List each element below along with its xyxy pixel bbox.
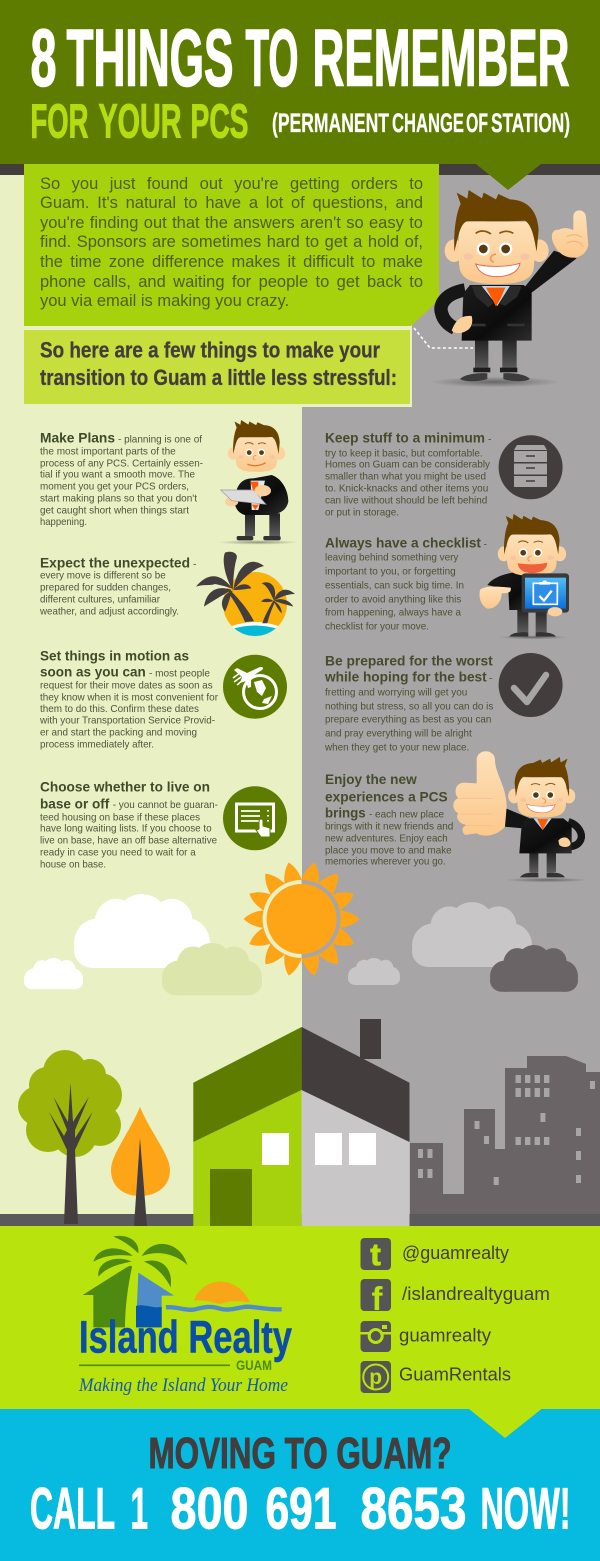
item: always have a checklist: checklist for your move. [325, 622, 429, 633]
icon: palm trees and sunset [196, 552, 295, 640]
dark strip below header [0, 164, 600, 175]
item: enjoy the new experiences: experiences a PCS [325, 788, 448, 804]
item: enjoy the new experiences: brings with it new friends and [325, 821, 454, 832]
item: always have a checklist: essentials, can suck big time. In [325, 581, 464, 592]
social: facebook: f [372, 1280, 384, 1317]
item: make plans: Make Plans [40, 430, 115, 446]
item: choose whether to live on base: live on base, have an off base alternative [40, 835, 217, 846]
icon: check mark [499, 653, 563, 717]
logo: Island Realty Guam [78, 1236, 292, 1396]
item: enjoy the new experiences: - each new place [369, 809, 444, 820]
item: keep stuff to a minimum: smaller than what you might be used [325, 471, 486, 482]
item: always have a checklist: order to avoid anything like this [325, 595, 461, 606]
icon: touch screen [223, 786, 287, 850]
illustration: orange tree [111, 1107, 170, 1226]
social: pinterest: p [369, 1366, 382, 1389]
panel: call to action [0, 1409, 600, 1561]
item: set things in motion: request for their move dates as soon as [40, 680, 213, 691]
item: keep stuff to a minimum [325, 430, 491, 518]
social: twitter: t [370, 1237, 381, 1272]
subtitle note: (PERMANENT [272, 108, 389, 138]
item: choose whether to live on base: house on base. [40, 859, 106, 870]
item: set things in motion: with your Transportation Service Provid- [39, 715, 215, 726]
header banner [0, 0, 600, 190]
ground strip [0, 1214, 600, 1226]
item: always have a checklist: Always have a checklist [325, 535, 481, 551]
call to action phone number: 8653 [360, 1477, 466, 1542]
intro paragraph: you're finding out that the answers aren't so easy to [40, 214, 423, 232]
item: be prepared for the worst: nothing but stress, so all you can do is [325, 702, 493, 713]
item: keep stuff to a minimum: or put in storage. [325, 507, 399, 518]
item: set things in motion: soon as you can [40, 664, 146, 680]
item: make plans: process of any PCS. Certainly essen- [40, 459, 203, 470]
icon: filing cabinet [499, 435, 563, 499]
item: be prepared for the worst: Be prepared for the worst [325, 653, 493, 669]
intro paragraph: Guam. It's natural to have a lot of questions, and [40, 194, 423, 212]
item: always have a checklist: leaving behind something very [325, 553, 459, 564]
intro paragraph: So you just found out you're getting orders to [40, 175, 423, 193]
subtitle: FOR [30, 96, 88, 148]
logo: Island Realty Guam: Making the Island Your Home [78, 1375, 288, 1396]
item: expect the unexpected: Expect the unexpected [40, 555, 190, 571]
item: be prepared for the worst: fretting and worrying will get you [325, 688, 468, 699]
item: enjoy the new experiences [325, 771, 454, 868]
social: pinterest: GuamRentals [399, 1364, 511, 1385]
item: always have a checklist: from happening, always have a [325, 608, 461, 619]
item: set things in motion: er and start the packing and moving [40, 727, 197, 738]
social: twitter [360, 1237, 510, 1272]
item: set things in motion [39, 648, 219, 750]
heading: moving to Guam: MOVING TO GUAM? [148, 1430, 452, 1478]
item: be prepared for the worst: prepare everything as best as you can [325, 715, 492, 726]
item: be prepared for the worst: when they get to your new place. [324, 743, 469, 754]
panel: intro box [24, 164, 439, 326]
panel: lead-in box: transition to Guam a little less stressful: [40, 365, 397, 390]
title: 8 [30, 14, 56, 104]
social: twitter: @guamrealty [402, 1242, 510, 1263]
subtitle note: OF [466, 108, 488, 138]
item: choose whether to live on base: Choose whether to live on [40, 779, 210, 795]
item: be prepared for the worst [324, 653, 493, 754]
item: expect the unexpected: different cultures, unfamiliar [40, 594, 160, 605]
subtitle note: CHANGE [392, 108, 464, 138]
item: expect the unexpected: weather, and adjust accordingly. [39, 606, 179, 617]
social: facebook [360, 1279, 550, 1317]
panel: footer contact band [0, 1226, 600, 1410]
item: make plans: tial if you want a smooth move. The [40, 470, 195, 481]
item: choose whether to live on base [40, 779, 218, 870]
background: grey half [302, 170, 600, 1226]
social: pinterest [360, 1361, 511, 1393]
item: be prepared for the worst: and pray everything will be alright [325, 729, 472, 740]
intro paragraph: the time zone difference makes it difficult to make [40, 253, 423, 271]
item: always have a checklist [325, 535, 487, 633]
item: enjoy the new experiences: Enjoy the new [325, 771, 417, 787]
logo: Island Realty Guam: Island Realty [79, 1312, 292, 1363]
item: enjoy the new experiences: memories wherever you go. [325, 857, 446, 868]
item: be prepared for the worst: while hoping for the best [324, 669, 487, 685]
call to action phone number: 1 [130, 1477, 148, 1542]
item: choose whether to live on base: ready in case you need to wait for a [40, 847, 196, 858]
social: instagram: guamrealty [399, 1325, 492, 1346]
illustration: businessman with tablet [218, 420, 298, 545]
item: make plans [40, 430, 203, 528]
item: enjoy the new experiences: place you move to and make [325, 845, 452, 856]
item: always have a checklist: important to you, or forgetting [325, 567, 456, 578]
panel: lead-in box: So here are a few things to make your [40, 337, 380, 362]
item: make plans: get caught short when things start [40, 506, 189, 517]
logo: Island Realty Guam: GUAM [236, 1358, 272, 1373]
item: keep stuff to a minimum: Keep stuff to a minimum [325, 430, 485, 446]
item: keep stuff to a minimum: to. Knick-knacks and other items you [325, 483, 489, 494]
item: expect the unexpected: prepared for sudden changes, [40, 582, 171, 593]
item: make plans: happening. [40, 517, 87, 528]
call to action phone number: 800 [170, 1477, 248, 1542]
item: choose whether to live on base: teed housing on base if these places [40, 812, 200, 823]
item: make plans: moment you get your PCS orders, [40, 482, 189, 493]
title: THINGS [66, 14, 234, 104]
item: make plans: the most important parts of the [40, 447, 176, 458]
dashed connector [414, 328, 473, 348]
icon: plane and globe [223, 655, 287, 719]
item: keep stuff to a minimum: can live without should be left behind [325, 495, 488, 506]
subtitle: PCS [190, 96, 248, 148]
social: instagram [360, 1321, 492, 1352]
illustration: clouds, sunny side [24, 894, 262, 995]
item: be prepared for the worst: - [489, 674, 492, 685]
background: light area behind intro boxes [0, 170, 412, 407]
illustration: city skyline [410, 1056, 600, 1214]
subtitle: YOUR [98, 96, 182, 148]
illustration: pointing businessman [430, 190, 588, 387]
item: expect the unexpected [39, 555, 196, 617]
item: set things in motion: Set things in motion as [40, 648, 189, 664]
title: TO [246, 14, 298, 104]
intro paragraph [40, 175, 423, 310]
illustration: businessman with checklist tablet [479, 514, 569, 639]
call to action phone number: CALL [30, 1477, 114, 1542]
illustration: sun [244, 860, 360, 978]
intro paragraph: you via email is making you crazy. [40, 292, 289, 310]
item: keep stuff to a minimum: Homes on Guam can be considerably [325, 459, 491, 470]
item: choose whether to live on base: have long waiting lists. If you choose to [40, 823, 212, 834]
illustration: businessman thumbs up [453, 751, 588, 882]
item: always have a checklist: - [484, 540, 487, 551]
item: enjoy the new experiences: new adventures. Enjoy each [325, 833, 448, 844]
item: set things in motion: them to do this. Confirm these dates [40, 704, 199, 715]
panel: lead-in box [23, 329, 411, 405]
background: light half [0, 0, 302, 1226]
item: set things in motion: they know when it is most convenient for [40, 692, 219, 703]
item: keep stuff to a minimum: - [488, 435, 491, 446]
illustration: clouds, grey side [348, 902, 578, 992]
item: make plans: start making plans so that you don't [40, 494, 197, 505]
call to action phone number: 691 [266, 1477, 336, 1542]
item: set things in motion: - most people [149, 669, 210, 680]
item: keep stuff to a minimum: try to keep it basic, but comfortable. [325, 449, 483, 460]
item: choose whether to live on base: - you cannot be guaran- [113, 800, 218, 811]
item: expect the unexpected: - [193, 560, 196, 571]
item: set things in motion: process immediately after. [40, 739, 154, 750]
intro paragraph: phone calls, and waiting for people to get back to [40, 273, 423, 291]
illustration: green tree [18, 1050, 122, 1224]
item: choose whether to live on base: base or off [40, 795, 110, 811]
social: facebook: /islandrealtyguam [402, 1283, 550, 1304]
illustration: house [193, 1019, 410, 1226]
item: enjoy the new experiences: brings [325, 804, 366, 820]
item: expect the unexpected: every move is different so be [40, 570, 166, 581]
item: make plans: - planning is one of [118, 435, 202, 446]
intro paragraph: find. Sponsors are sometimes hard to get a hold of, [40, 233, 423, 251]
